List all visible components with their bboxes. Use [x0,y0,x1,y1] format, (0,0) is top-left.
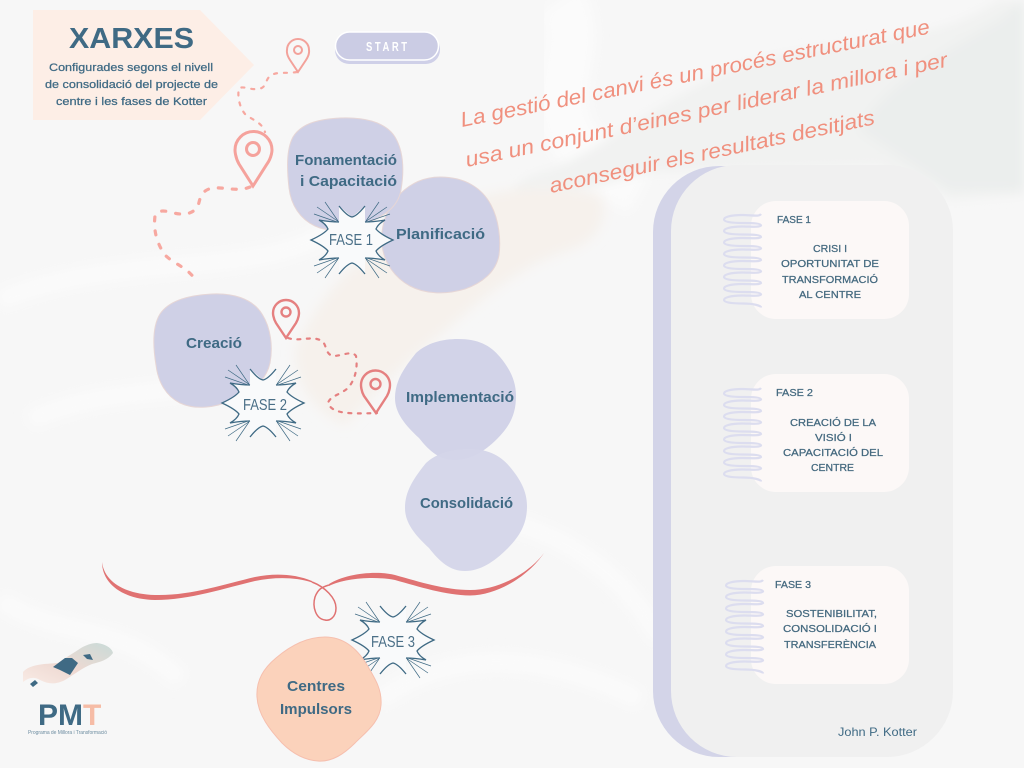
grey brush swoosh [515,0,1024,205]
fase 1 text: FASE 1 [777,214,811,226]
handwritten quote: usa un conjunt d’eines per liderar la millora i per [463,49,951,172]
handwritten quote: aconseguir els resultats desitjats [547,106,877,198]
label: Creació: Creació [186,335,242,352]
fase 1 text: CRISI I [813,243,847,255]
label: Fonamentació i Capacitació: i Capacitació [300,173,397,190]
title banner [33,10,254,120]
logo tagline: Programa de Millora i Transformació [28,730,107,736]
starburst: FASE 3 [352,602,434,678]
handwritten quote [458,16,951,198]
starburst: FASE 2: FASE 2 [243,397,287,414]
fase 1 text [777,214,879,301]
dashed route 1 [238,72,297,132]
blob: Creació [154,294,271,407]
dashed route 2 [155,187,250,283]
card: fase 1 [724,201,909,319]
label: Consolidació: Consolidació [420,495,513,512]
starburst: FASE 3: FASE 3 [371,634,415,651]
fase 3 text: TRANSFERÈNCIA [784,638,876,651]
blob: Consolidació [405,449,527,571]
peach brush swoosh [295,188,604,425]
dashed route 3 [288,338,377,413]
fase 2 text: CAPACITACIÓ DEL [783,446,883,459]
title: XARXES [69,23,194,55]
pin: large [235,132,272,186]
label: Fonamentació i Capacitació [295,152,397,190]
logo brush [23,643,113,683]
handwritten quote: La gestió del canvi és un procés estructurat que [458,16,932,132]
starburst: FASE 1 [311,202,393,278]
ribbon [102,553,544,620]
fase 2 text [776,387,883,474]
start button [335,32,440,64]
fase 3 text: CONSOLIDACIÓ I [783,622,877,635]
starburst: FASE 2 [222,365,304,441]
start button: START [366,41,407,54]
spring 3 [726,580,763,674]
blob: Fonamentació i Capacitació [288,118,403,230]
label: Centres Impulsors: Impulsors [280,701,352,718]
fase 1 text: AL CENTRE [799,289,861,301]
fase 2 text: VISIÓ I [815,431,852,444]
label: Implementació: Implementació [406,389,514,406]
spring 1 [724,214,761,308]
blob: Implementació [395,339,516,460]
card: fase 3 [726,566,909,684]
subtitle: Configurades segons el nivell [49,62,213,74]
fase 3 text [775,579,877,651]
subtitle: centre i les fases de Kotter [56,96,207,108]
fase 2 text: FASE 2 [776,387,813,399]
fase 1 text: TRANSFORMACIÓ [782,273,878,286]
label: Fonamentació i Capacitació: Fonamentació [295,152,397,169]
panel: fases [653,165,953,757]
fase 3 text: FASE 3 [775,579,811,591]
label: Planificació: Planificació [396,226,485,243]
spring 2 [724,388,761,482]
fase 3 text: SOSTENIBILITAT, [786,608,877,620]
logo islands [30,654,93,687]
starburst: FASE 1: FASE 1 [329,232,373,249]
blob: Centres Impulsors [257,637,381,761]
fase 1 text: OPORTUNITAT DE [781,258,879,270]
label: Centres Impulsors [280,678,352,718]
card: fase 2 [724,374,909,492]
logo wordmark: T [83,699,101,732]
subtitle [45,62,218,108]
pin: small start [287,39,309,72]
pin: route 3 start [273,300,299,338]
label: Centres Impulsors: Centres [287,678,345,695]
logo wordmark: PM [38,699,83,732]
logo PMT [23,643,113,736]
pin: route 3 end [361,370,390,413]
blob: Planificació [382,177,500,293]
attribution: John P. Kotter [838,725,917,739]
subtitle: de consolidació del projecte de [45,79,218,91]
fase 2 text: CENTRE [811,462,854,474]
fase 2 text: CREACIÓ DE LA [790,416,876,429]
